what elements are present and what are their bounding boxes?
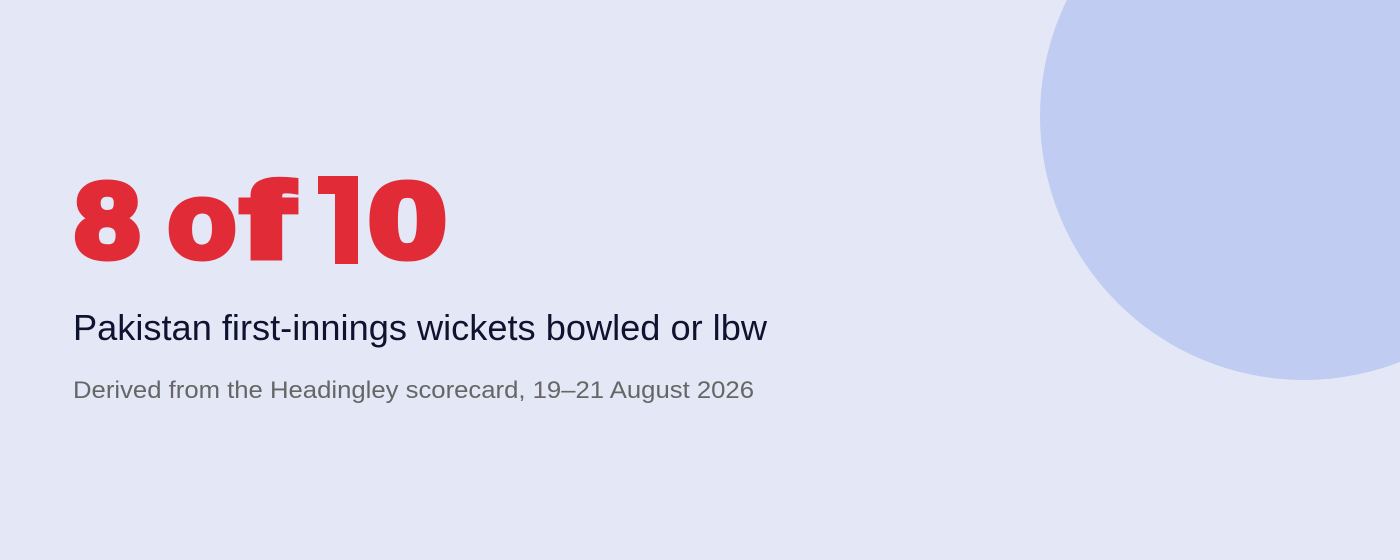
headline statistic: f <box>241 162 294 280</box>
decorative circle <box>1040 0 1400 380</box>
headline statistic <box>75 162 446 280</box>
headline statistic: o <box>168 162 236 280</box>
subtitle: Pakistan first-innings wickets bowled or lbw <box>73 307 768 348</box>
source note: Derived from the Headingley scorecard, 19–21 August 2026 <box>73 377 754 404</box>
headline statistic: 0 <box>368 162 446 280</box>
headline statistic: 1 <box>316 162 374 280</box>
headline statistic: 8 <box>75 162 140 280</box>
